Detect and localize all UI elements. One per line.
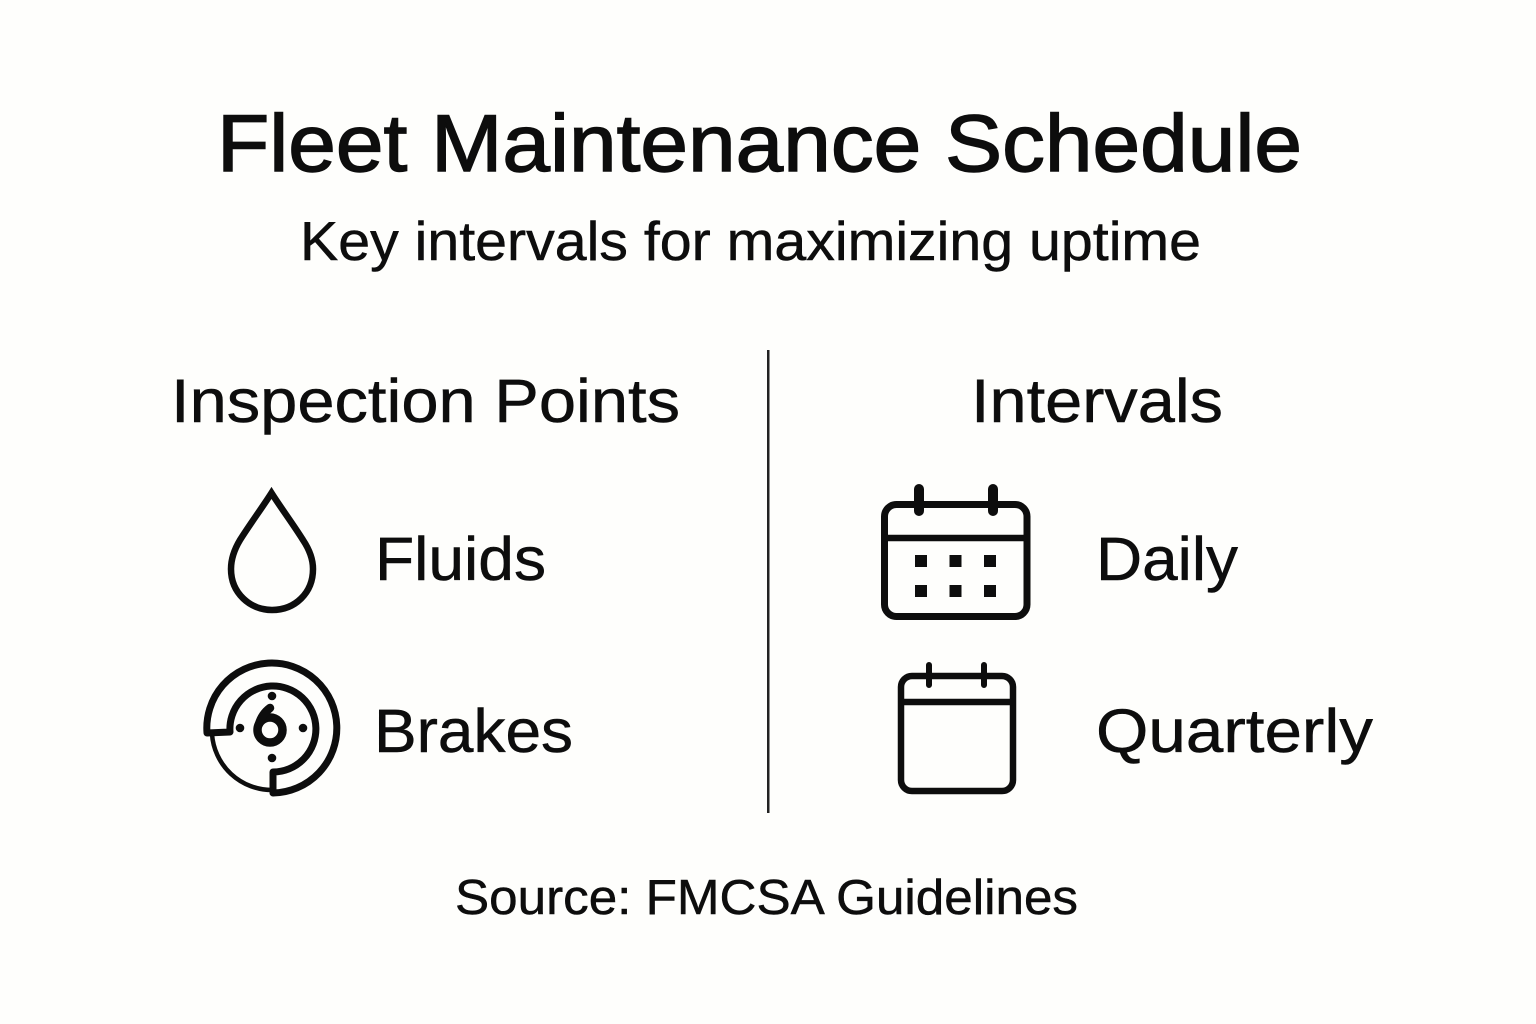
panel: intervals	[884, 367, 1374, 791]
label: fluids: Fluids	[375, 525, 546, 593]
label: brakes: Brakes	[374, 697, 573, 765]
label: daily: Daily	[1096, 525, 1239, 593]
source note: Source: FMCSA Guidelines	[455, 871, 1078, 925]
icon: brake disc	[207, 663, 337, 793]
title: Fleet Maintenance Schedule	[217, 99, 1302, 189]
heading: inspection points: Inspection Points	[171, 367, 680, 435]
heading: intervals: Intervals	[971, 367, 1223, 435]
panel: inspection points	[171, 367, 680, 793]
icon: daily calendar	[884, 489, 1027, 616]
icon: quarterly calendar	[901, 665, 1013, 791]
divider	[767, 350, 770, 813]
label: quarterly: Quarterly	[1096, 697, 1374, 765]
icon: fluid drop	[231, 493, 313, 610]
subtitle: Key intervals for maximizing uptime	[300, 210, 1201, 272]
